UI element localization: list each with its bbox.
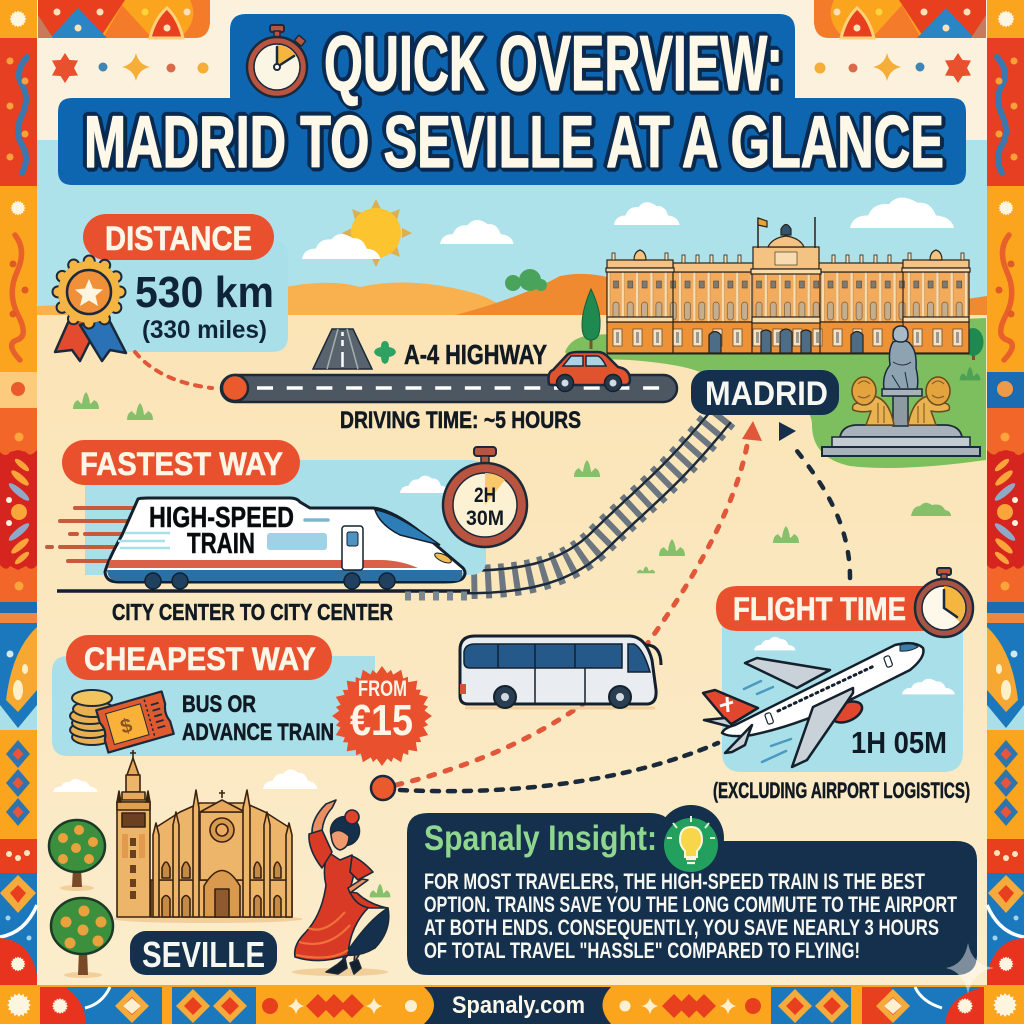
legs and shoes bbox=[342, 950, 362, 963]
route to Madrid: navy dashed bbox=[400, 743, 718, 791]
decorative border: bottom bbox=[0, 985, 1024, 1024]
icon: train: TRAIN bbox=[187, 528, 255, 560]
distance label: DISTANCE bbox=[105, 220, 252, 258]
lion left bbox=[852, 377, 894, 425]
panel: fastest way bbox=[47, 440, 527, 625]
cheapest label: CHEAPEST WAY bbox=[84, 641, 316, 677]
raised arm bbox=[312, 800, 336, 838]
icon: ticket: $ bbox=[118, 714, 135, 739]
insight heading: Spanaly Insight: bbox=[424, 819, 657, 858]
panel: Spanaly Insight bbox=[407, 805, 977, 975]
top decoration: stars and dots left bbox=[52, 53, 208, 83]
icon: train bbox=[105, 498, 465, 589]
bent arm bbox=[350, 856, 373, 880]
flight route up: navy dashed bbox=[790, 442, 850, 578]
underskirt bbox=[345, 908, 389, 955]
icon: car bbox=[548, 352, 630, 392]
icon: medal bbox=[55, 261, 126, 361]
small clouds near Seville bbox=[53, 769, 317, 792]
route to Madrid: red dashed bbox=[396, 440, 748, 785]
icon: coins bbox=[70, 690, 113, 745]
orange tree top bbox=[49, 820, 105, 891]
cheapest text: BUS OR bbox=[182, 691, 256, 718]
icon: stopwatch 2H 30M: 2H bbox=[474, 484, 496, 507]
insight body bbox=[424, 869, 957, 963]
dashed route from distance bbox=[135, 352, 212, 388]
train label: HIGH-SPEED bbox=[149, 502, 294, 534]
Royal Palace of Madrid bbox=[606, 217, 970, 354]
driving time: DRIVING TIME: ~5 HOURS bbox=[340, 407, 581, 434]
icon: ticket bbox=[96, 691, 174, 753]
small green trees on hill bbox=[505, 269, 547, 291]
Giralda tower bbox=[130, 750, 136, 758]
decorative border: top right bbox=[814, 0, 986, 38]
icon: green cross bbox=[374, 341, 396, 364]
head bbox=[330, 816, 360, 846]
price badge: €15 bbox=[350, 696, 413, 745]
Madrid lawn bbox=[565, 318, 986, 468]
panel: cheapest way: ADVANCE TRAIN bbox=[182, 719, 334, 746]
speed lines bbox=[47, 508, 140, 561]
icon: highway bbox=[313, 329, 372, 369]
flight label: FLIGHT TIME bbox=[733, 591, 906, 627]
lion right bbox=[908, 377, 950, 425]
icon: bus bbox=[460, 636, 661, 708]
icon: round tree bbox=[962, 328, 984, 360]
icon: light bulb bbox=[658, 805, 724, 872]
distance in miles: (330 miles) bbox=[142, 316, 267, 344]
panel: cheapest way bbox=[52, 635, 437, 771]
title banner bbox=[58, 14, 966, 185]
decorative border: top left bbox=[38, 0, 210, 38]
footer site name: Spanaly.com bbox=[452, 992, 585, 1019]
grass tufts bbox=[73, 367, 980, 897]
icon: cypress tree bbox=[582, 289, 600, 349]
statue bbox=[884, 326, 918, 389]
title line 1: QUICK OVERVIEW: bbox=[324, 19, 783, 107]
arrow: red bbox=[742, 421, 762, 441]
sky: sun and clouds bbox=[302, 198, 954, 291]
speed marks bbox=[744, 681, 791, 762]
road bbox=[221, 375, 677, 402]
origin marker: Seville bbox=[371, 776, 395, 800]
highway label: A-4 HIGHWAY bbox=[404, 339, 547, 370]
fastest label: FASTEST WAY bbox=[80, 446, 283, 482]
Madrid label: MADRID bbox=[705, 375, 828, 413]
distance value: 530 km bbox=[135, 268, 274, 317]
flamenco dancer bbox=[292, 800, 389, 976]
cathedral bbox=[151, 880, 292, 917]
icon: clock bbox=[915, 568, 973, 637]
sparkle watermark bbox=[946, 943, 994, 994]
icon: stopwatch 2H 30M bbox=[443, 447, 527, 547]
Seville label: SEVILLE bbox=[142, 934, 265, 975]
arrow: navy bbox=[779, 422, 796, 441]
track bbox=[57, 589, 470, 593]
skirt and bodice bbox=[295, 852, 370, 961]
railway bbox=[465, 415, 722, 582]
icon: stopwatch 2H 30M: 30M bbox=[466, 507, 504, 530]
panel: distance bbox=[55, 214, 288, 361]
decorative border: right bbox=[987, 0, 1024, 985]
top decoration: stars and dots right bbox=[814, 53, 971, 83]
insight body: OF TOTAL TRAVEL "HASSLE" COMPARED TO FLYING! bbox=[424, 938, 860, 963]
decorative border: left bbox=[0, 0, 37, 985]
orange tree bottom bbox=[51, 898, 113, 978]
panel: flight time bbox=[703, 568, 973, 803]
Seville cathedral and Giralda bbox=[113, 750, 303, 923]
icon: stopwatch bbox=[247, 25, 307, 97]
flight duration: 1H 05M bbox=[851, 725, 947, 760]
icon: airplane bbox=[703, 643, 923, 767]
city to city caption: CITY CENTER TO CITY CENTER bbox=[112, 599, 393, 625]
Cibeles fountain bbox=[822, 326, 980, 456]
price badge: FROM bbox=[358, 676, 407, 701]
price badge bbox=[327, 661, 437, 771]
